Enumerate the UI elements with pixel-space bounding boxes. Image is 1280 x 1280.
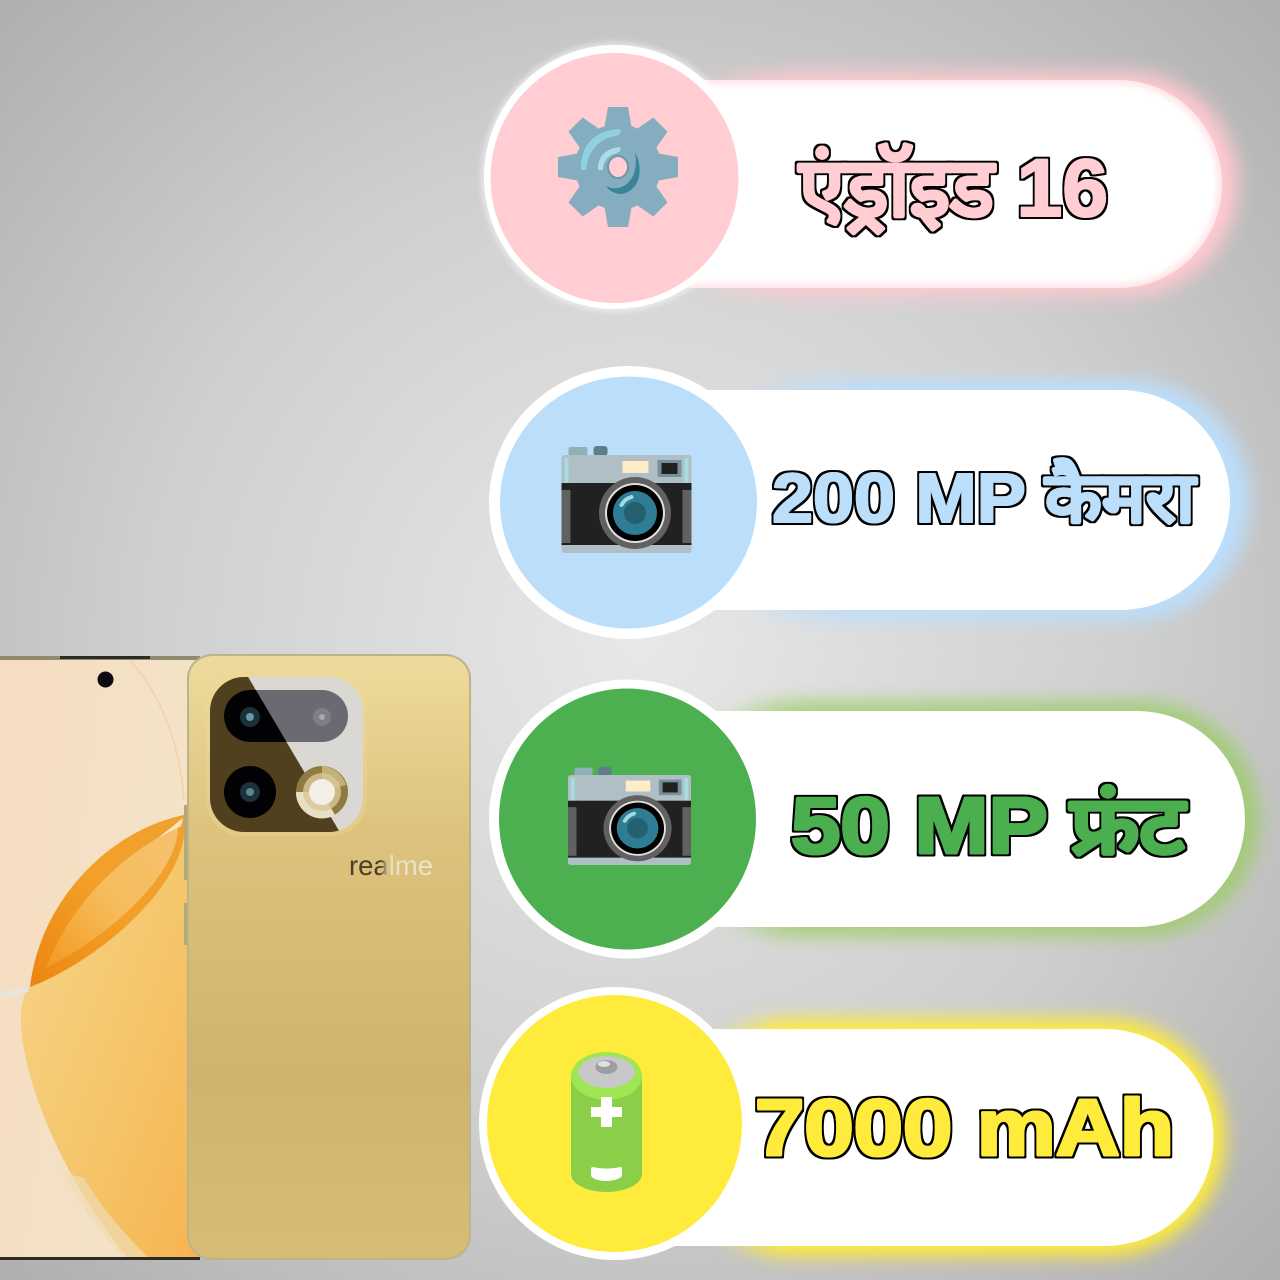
icon: gear	[558, 107, 678, 227]
icon: camera	[562, 446, 692, 553]
lower lens	[224, 766, 276, 818]
phone front view	[0, 656, 200, 1260]
phone back view	[187, 654, 471, 1260]
label: 50 MP front: 50 MP फ्रंट	[791, 781, 1187, 870]
label: android 16: एंड्रॉइड 16	[797, 143, 1108, 235]
spec row: front camera	[489, 680, 1260, 958]
spec row: android	[481, 42, 1238, 312]
icon: camera	[568, 767, 691, 865]
spec row: main camera	[489, 366, 1250, 639]
upper lens pill	[224, 690, 348, 742]
camera module	[206, 673, 367, 836]
spec row: battery	[479, 987, 1225, 1260]
realme logo: realme	[349, 850, 433, 881]
label: 7000 mAh: 7000 mAh	[755, 1083, 1174, 1172]
side buttons	[184, 805, 187, 945]
flash ring	[296, 766, 348, 818]
selfie camera hole	[98, 672, 114, 688]
label: 200 MP camera: 200 MP कैमरा	[772, 458, 1198, 537]
icon: battery	[571, 1052, 642, 1192]
